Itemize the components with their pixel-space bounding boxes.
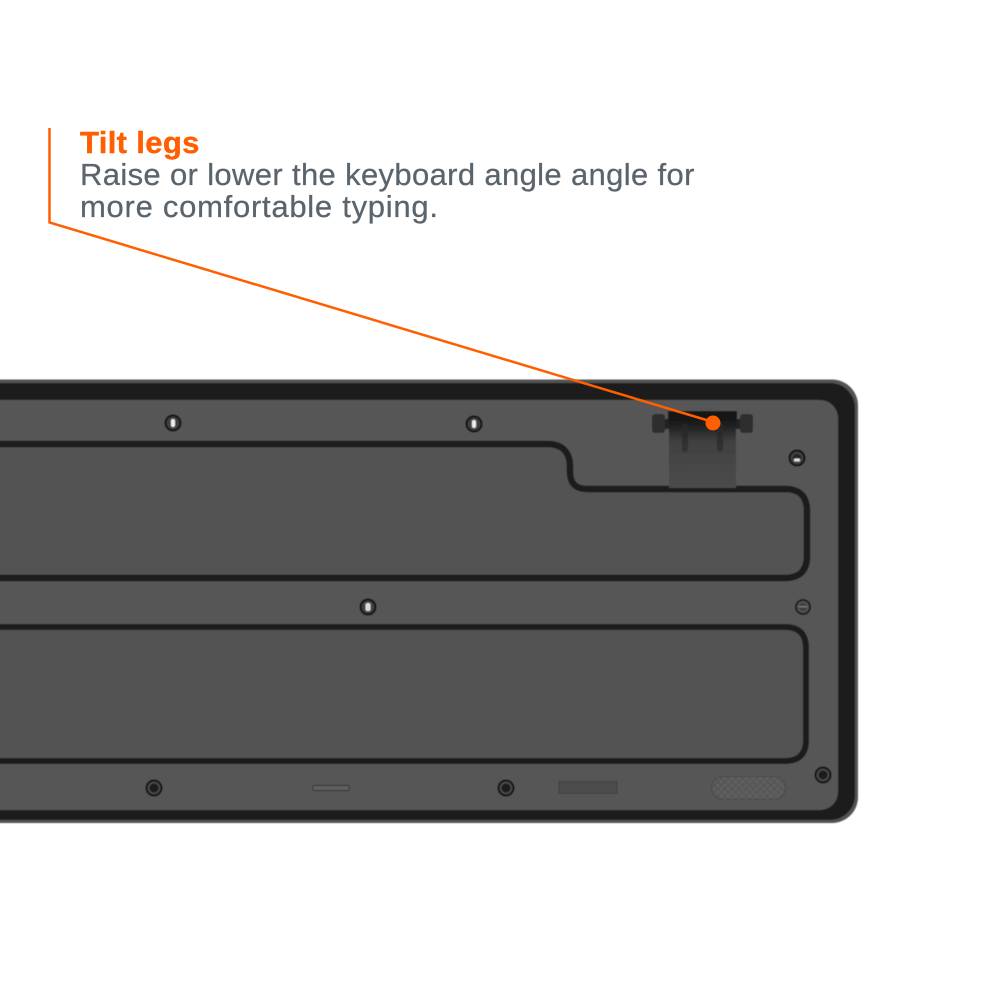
callout description [80,157,695,224]
keyboard outer shell [0,380,858,823]
callout description: more comfortable typing. [80,189,439,224]
left hinge neck [664,419,670,429]
lower recessed panel [0,627,806,761]
callout text [80,125,695,224]
top screw 2 [466,416,482,432]
right top screw [790,450,804,466]
right hinge knob [740,414,753,433]
tilt leg [652,411,753,488]
leg slots [682,423,688,452]
rubber foot [712,776,786,800]
leg inset [680,462,724,470]
right middle screw [796,600,810,614]
base plate [0,400,838,810]
label recess [559,782,617,794]
callout leader line [50,128,713,422]
upper recessed panel [0,444,807,578]
bottom screw 2 [498,780,514,796]
small slot [312,786,350,790]
bottom screw 1 [146,780,162,796]
left hinge knob [652,414,665,433]
keyboard dark rim [0,383,855,820]
corner screw [816,768,830,782]
middle screw [360,600,376,614]
callout heading: Tilt legs [80,125,200,160]
leg plate [668,411,737,488]
keyboard underside [0,380,858,823]
top screw 1 [166,416,180,430]
right hinge neck [736,419,741,429]
callout dot [706,416,720,430]
screws [146,416,830,796]
callout description: Raise or lower the keyboard angle angle for [80,157,695,192]
